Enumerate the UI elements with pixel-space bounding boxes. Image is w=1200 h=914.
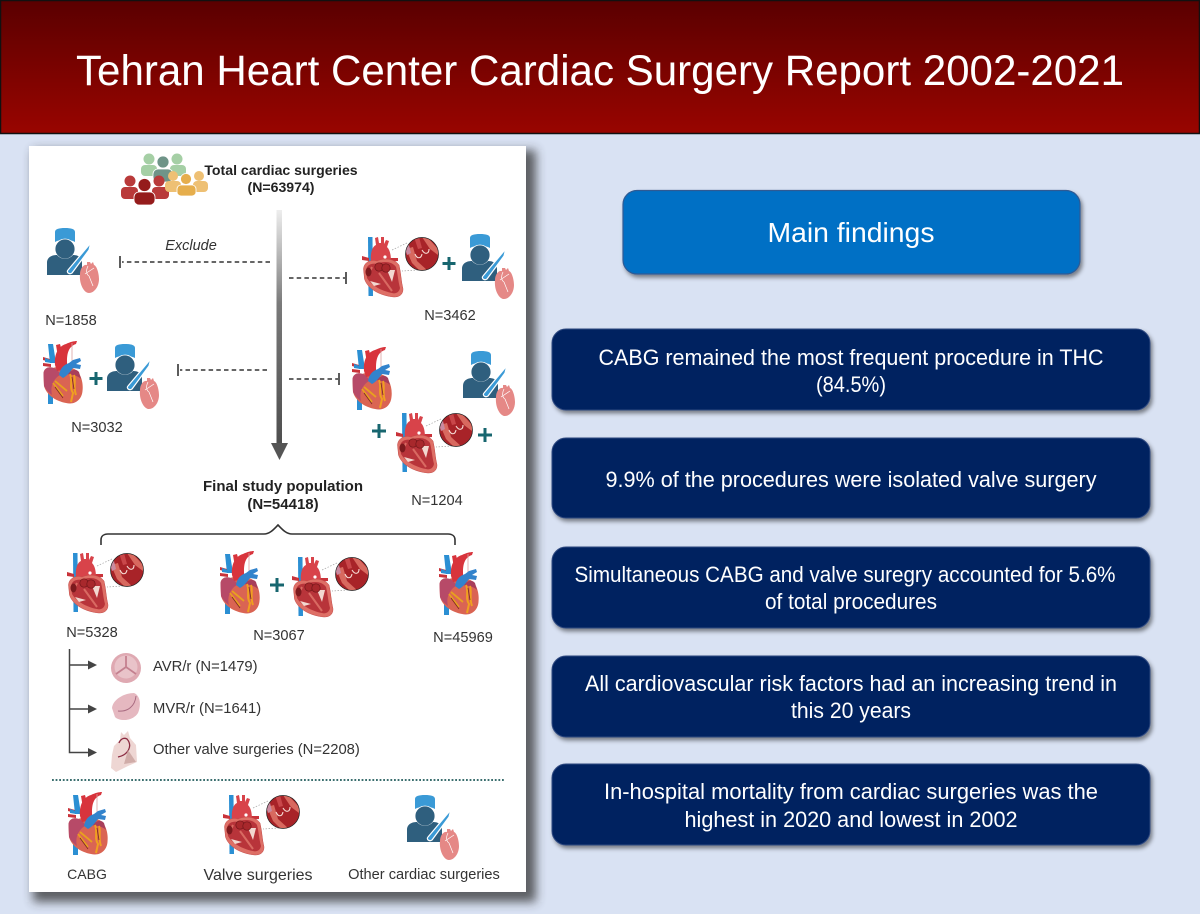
valve branch arrows	[70, 649, 97, 757]
icon: patient groups	[121, 154, 208, 205]
exclusion line upper left	[120, 256, 270, 268]
count 3462: N=3462	[424, 308, 476, 324]
exclusion line upper right	[289, 272, 346, 284]
icon: CABG plus surgeon	[43, 341, 159, 409]
heading: final study population: (N=54418)	[247, 496, 319, 513]
count 3032: N=3032	[71, 420, 123, 436]
legend divider	[52, 779, 505, 781]
heading: final study population: Final study population	[203, 478, 363, 495]
icon: valve heart plus surgeon	[362, 234, 514, 299]
finding 1: (84.5%)	[816, 372, 886, 397]
finding 5: In-hospital mortality from cardiac surgeries was the	[604, 779, 1098, 804]
legend: valve surgeries	[203, 795, 313, 884]
label AVR: AVR/r (N=1479)	[153, 659, 258, 675]
finding 3: of total procedures	[765, 589, 937, 614]
title banner	[0, 0, 1200, 134]
group: isolated CABG	[433, 552, 493, 646]
legend: other cardiac surgeries	[348, 795, 500, 883]
icon: other valve	[111, 731, 137, 772]
finding 1: CABG remained the most frequent procedure in THC	[598, 345, 1104, 370]
finding 5: highest in 2020 and lowest in 2002	[684, 807, 1018, 832]
finding 2: 9.9% of the procedures were isolated valve surgery	[606, 467, 1096, 492]
exclusion line lower right	[289, 373, 339, 385]
icon: aortic valve	[111, 653, 141, 683]
count 1858: N=1858	[45, 313, 97, 329]
legend: CABG	[67, 792, 108, 882]
heading: total cardiac surgeries: (N=63974)	[248, 179, 314, 195]
icon: mitral valve	[112, 693, 140, 720]
heading box: main findings	[623, 190, 1080, 274]
finding 4: All cardiovascular risk factors had an increasing trend in	[585, 671, 1117, 696]
finding 4: this 20 years	[791, 698, 911, 723]
exclusion line lower left	[178, 364, 267, 376]
legend: other cardiac surgeries: Other cardiac surgeries	[348, 867, 500, 883]
finding 4	[552, 656, 1150, 737]
legend: CABG: CABG	[67, 866, 107, 882]
label MVR: MVR/r (N=1641)	[153, 701, 261, 717]
finding 1	[552, 329, 1150, 410]
icon: CABG plus valve plus surgeon	[352, 347, 515, 473]
heading box: main findings: Main findings	[768, 217, 934, 248]
brace	[101, 525, 455, 545]
exclude label: Exclude	[165, 238, 217, 254]
finding 2	[552, 438, 1150, 518]
finding 5	[552, 764, 1150, 845]
heading: total cardiac surgeries: Total cardiac surgeries	[204, 162, 358, 178]
group: CABG plus valve: N=3067	[253, 628, 305, 644]
count 1204: N=1204	[411, 493, 463, 509]
main downward arrow	[271, 210, 288, 460]
icon: other cardiac surgery, excluded	[47, 228, 99, 293]
legend: valve surgeries: Valve surgeries	[203, 867, 313, 884]
group: CABG plus valve	[220, 551, 368, 644]
finding 3: Simultaneous CABG and valve suregry accounted for 5.6%	[574, 562, 1116, 587]
title: Tehran Heart Center Cardiac Surgery Report 2002-2021	[76, 47, 1124, 95]
label other valve: Other valve surgeries (N=2208)	[153, 742, 360, 758]
group: isolated valve: N=5328	[66, 625, 118, 641]
finding 3	[552, 547, 1150, 628]
panel: study flow diagram	[29, 146, 536, 902]
group: isolated valve	[66, 553, 144, 641]
group: isolated CABG: N=45969	[433, 630, 493, 646]
